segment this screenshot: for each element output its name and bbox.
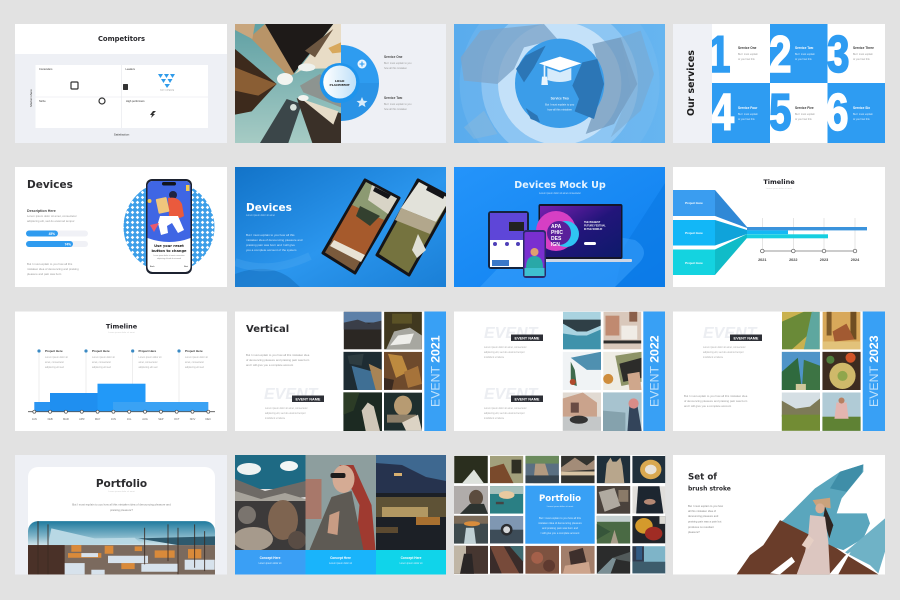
heading: set of brush stroke: Set of xyxy=(688,472,717,482)
portfolio centre block: Lorem ipsum dolor sit amet xyxy=(547,505,574,508)
month axis: MAY xyxy=(95,417,101,421)
service labels: Service Five xyxy=(795,106,814,110)
year band xyxy=(863,312,885,431)
month axis: FEB xyxy=(48,417,53,421)
laptop mockup: PHIC xyxy=(551,230,563,236)
service labels: Service Six xyxy=(853,106,870,110)
event block: EVENT NAME xyxy=(296,398,321,402)
phone mockup: Use your reset xyxy=(154,244,184,248)
heading: our services: Our services xyxy=(686,50,697,116)
month axis: JAN xyxy=(32,417,37,421)
event block two: EVENT xyxy=(484,386,539,403)
heading: timeline: Timeline xyxy=(763,178,795,186)
service labels: Service Three xyxy=(853,46,874,50)
photo grid 2023 xyxy=(782,312,861,431)
text: body: praising pleasure? xyxy=(110,508,133,512)
heading: portfolio: Portfolio xyxy=(96,478,147,490)
event block: Lorem ipsum dolor sit amet, consectetur xyxy=(265,407,308,410)
heading: set of brush stroke: brush stroke xyxy=(688,486,731,492)
panel: monthly timeline slide xyxy=(15,312,227,431)
service labels: Service Two xyxy=(795,46,813,50)
text: service one xyxy=(384,55,412,70)
month axis: JUL xyxy=(127,417,132,421)
text: body: denouncing pleasure and xyxy=(688,514,719,518)
text: body: But I must explain to you how all this mistaken idea of denouncing pleasure and xyxy=(72,502,171,506)
event block: incididunt ut labore xyxy=(265,417,286,420)
month axis: AUG xyxy=(142,417,148,421)
year band xyxy=(424,312,446,431)
service labels: But I must explain xyxy=(795,113,815,116)
numbers: 4 xyxy=(711,83,734,141)
service labels: But I must explain xyxy=(738,113,758,116)
panel: devices mock up slide: Lorem ipsum dolor sit amet consectetur xyxy=(539,192,581,195)
service labels: Service Four xyxy=(738,106,758,110)
progress bars xyxy=(26,230,88,247)
numbers: 5 xyxy=(769,83,792,141)
panel: portfolio grid slide xyxy=(454,455,665,574)
text: service two xyxy=(384,96,412,111)
text: service two: how all this mistaken xyxy=(547,107,572,111)
month axis xyxy=(28,410,215,421)
panel: timeline funnel slide: Lorem ipsum dolor sit amet xyxy=(766,187,793,190)
panel: graduation slide xyxy=(454,24,665,143)
tablet mockup xyxy=(488,211,529,269)
icon: company triangles xyxy=(158,74,175,88)
matrix chart: High performers xyxy=(126,99,145,103)
service labels: to you how this xyxy=(853,58,870,61)
concept bands: Lorem ipsum dolor sit xyxy=(400,562,423,565)
photo: woman with red hair xyxy=(306,455,376,550)
photo: snowy village xyxy=(28,521,215,574)
event block two: incididunt ut labore xyxy=(484,417,505,420)
month axis: SEP xyxy=(158,417,164,421)
event block: EVENT xyxy=(264,386,319,403)
service labels: Service One xyxy=(738,46,757,50)
event block: Lorem ipsum dolor sit amet, consectetur xyxy=(703,346,746,349)
month axis: APR xyxy=(79,417,85,421)
event block two: EVENT NAME xyxy=(515,398,540,402)
matrix chart: Core company xyxy=(160,88,175,92)
time axis xyxy=(758,249,860,262)
text: body: But I must explain to you how all this xyxy=(246,233,295,237)
service labels: But I must explain xyxy=(795,53,815,56)
event block one: Lorem ipsum dolor sit amet, consectetur xyxy=(484,346,527,349)
progress bars: 74% xyxy=(65,242,71,246)
text: service one: how all this mistaken xyxy=(384,67,408,70)
service labels: to you how this xyxy=(738,118,755,121)
project items: Project Here xyxy=(138,349,157,353)
brush stroke image xyxy=(736,464,885,574)
matrix chart xyxy=(29,65,208,136)
event block one: EVENT xyxy=(484,325,539,342)
laptop mockup: THE BIGGEST xyxy=(584,221,601,224)
text: body xyxy=(246,353,310,367)
text: body xyxy=(246,233,303,252)
month axis: JUN xyxy=(111,417,116,421)
panel: timeline funnel slide xyxy=(673,167,885,287)
text: description xyxy=(27,209,77,223)
half circle diagram xyxy=(320,45,379,121)
panel: three concepts slide xyxy=(233,455,446,574)
time axis: 2024 xyxy=(851,258,860,262)
project items xyxy=(37,349,208,402)
panel: portfolio card slide xyxy=(15,455,227,574)
text: body: you a complete account of the system xyxy=(246,248,297,252)
panel: devices slide xyxy=(15,167,227,287)
portfolio centre block xyxy=(525,486,595,544)
numbers xyxy=(708,25,850,141)
panel: devices blue slide xyxy=(235,167,446,287)
concept bands: Lorem ipsum dolor sit xyxy=(329,562,352,565)
text: body: pleasure? xyxy=(688,530,700,534)
concept bands: Concept Here xyxy=(401,556,422,560)
laptop mockup: IN THE WORLD! xyxy=(584,228,603,231)
progress bars: 45% xyxy=(49,232,55,236)
heading: Devices Mock Up xyxy=(514,180,606,191)
text: body: pleasure and pain was born xyxy=(27,272,62,276)
text: body xyxy=(72,502,171,512)
year band: EVENT 2023 xyxy=(867,335,881,407)
photo: skyscrapers xyxy=(235,24,341,143)
event block xyxy=(703,325,762,359)
numbers: 1 xyxy=(708,25,731,83)
text: body xyxy=(688,504,723,534)
illustration: reading figure xyxy=(148,185,190,235)
text: service two: But I must explain to you xyxy=(384,103,412,106)
concept bands: Lorem ipsum dolor sit xyxy=(259,562,282,565)
project items: adipiscing elit sed xyxy=(138,366,158,369)
event block one xyxy=(484,325,543,359)
month axis: OCT xyxy=(174,417,180,421)
laptop mockup xyxy=(533,204,632,262)
event block two: adipiscing elit, sed do eiusmod tempor xyxy=(484,412,525,415)
text: body xyxy=(27,262,79,276)
gantt bars xyxy=(747,218,867,250)
month axis: NOV xyxy=(190,417,196,421)
service labels: to you how this xyxy=(795,58,812,61)
service labels: But I must explain xyxy=(738,53,758,56)
event block: adipiscing elit, sed do eiusmod tempor xyxy=(703,351,744,354)
central circle xyxy=(515,39,604,128)
project items: Project Here xyxy=(45,349,63,353)
matrix chart: Market share xyxy=(29,89,33,107)
text: description: adipiscing elit, sed do eiusmod tempor xyxy=(27,219,75,223)
service labels: to you how this xyxy=(738,58,755,61)
project items: Lorem ipsum dolor sit xyxy=(185,356,208,359)
text: body: and I will give you a complete account xyxy=(246,363,293,367)
logo circle: LOGO xyxy=(335,79,345,83)
photo: night city xyxy=(376,455,446,550)
matrix chart: Leaders xyxy=(126,67,136,71)
event block: EVENT xyxy=(703,325,758,342)
project items: amet, consectetur xyxy=(138,361,158,364)
project items: Project Here xyxy=(185,349,203,353)
icon: graduation cap xyxy=(539,57,581,85)
text: body: of denouncing pleasure and praising pain was born xyxy=(684,399,748,403)
project items: amet, consectetur xyxy=(45,361,64,364)
funnel: Project Here xyxy=(685,231,703,235)
panel: our services slide xyxy=(673,24,885,143)
photo grid 2022 xyxy=(563,312,642,431)
heading: set of brush stroke xyxy=(688,472,731,492)
photo tiles xyxy=(454,456,665,574)
laptop mockup: APA xyxy=(551,224,562,230)
text: description: Description Here xyxy=(27,209,56,213)
woman figure xyxy=(797,498,833,574)
phone mockup: Back xyxy=(150,266,154,268)
panel: brush stroke slide xyxy=(673,455,885,574)
palm leaves xyxy=(461,24,654,139)
text: service two: Service Two xyxy=(551,96,569,100)
text: body: of denouncing pleasure and praising pain was born xyxy=(246,358,310,362)
matrix chart: Satisfaction xyxy=(114,132,130,136)
text: service two xyxy=(545,96,575,111)
icon: plus xyxy=(358,60,366,68)
event block xyxy=(264,386,324,420)
text: body: praising pain was a pain but xyxy=(688,520,722,524)
phone mockup: Lorem ipsum dolor sit amet consectetur xyxy=(153,254,185,257)
concept bands: Concept Here xyxy=(330,556,351,560)
text: body: and I will give you a complete account xyxy=(684,404,731,408)
phone mockup: adipiscing elit sed do eiusmod xyxy=(157,257,181,260)
text: body: But I must explain to you how all this mistaken idea xyxy=(246,353,310,357)
numbers: 3 xyxy=(827,25,850,83)
heading: devices: Devices xyxy=(246,202,292,214)
funnel: Project Here xyxy=(685,201,703,205)
project items: amet, consectetur xyxy=(92,361,111,364)
year band: EVENT 2022 xyxy=(648,335,662,407)
text: body: But I must explain to you how all this xyxy=(27,262,73,266)
event block one: adipiscing elit, sed do eiusmod tempor xyxy=(484,351,525,354)
concept bands xyxy=(235,550,446,574)
panel: monthly timeline slide: Lorem ipsum dolor sit amet xyxy=(108,331,135,334)
portfolio centre block: and praising pain was born and xyxy=(542,526,579,530)
service labels xyxy=(738,46,874,121)
event block: adipiscing elit, sed do eiusmod tempor xyxy=(265,412,306,415)
matrix chart: Contenders xyxy=(39,67,53,71)
funnel xyxy=(673,190,747,275)
text: body: mistaken idea of denouncing and praising xyxy=(27,267,79,271)
service labels: But I must explain xyxy=(853,53,873,56)
project items: Project Here xyxy=(92,349,110,353)
halftone sphere xyxy=(124,182,214,272)
photo grid 2021 xyxy=(343,312,422,431)
text: body: praising pain was born and I will give xyxy=(246,243,295,247)
text: service one: But I must explain to you xyxy=(384,62,412,65)
concept bands: Concept Here xyxy=(260,556,281,560)
phone mockup xyxy=(523,230,546,278)
logo circle xyxy=(320,63,360,103)
project items: amet, consectetur xyxy=(185,361,204,364)
text: service one: Service One xyxy=(384,55,403,59)
laptop mockup: FUTURE FESTIVAL xyxy=(584,224,606,228)
text: service two: Service Two xyxy=(384,96,402,100)
icon: star xyxy=(356,97,368,107)
phone mockup xyxy=(146,179,192,274)
text: body xyxy=(684,394,748,408)
event block: incididunt ut labore xyxy=(703,356,724,359)
service labels: But I must explain xyxy=(853,113,873,116)
panel: logo placement slide xyxy=(235,24,446,143)
portfolio centre block: I will give you a complete account xyxy=(541,531,580,535)
laptop mockup: DES xyxy=(551,236,562,242)
heading: devices: Devices xyxy=(27,179,73,191)
portfolio centre block: mistaken idea of denouncing pleasure xyxy=(538,521,582,525)
project items: adipiscing elit sed xyxy=(92,366,112,369)
month axis: DEC xyxy=(206,417,211,421)
project items: adipiscing elit sed xyxy=(185,366,205,369)
month axis: MAR xyxy=(63,417,69,421)
logo circle: PLACEMENT xyxy=(330,83,351,87)
event block two: Lorem ipsum dolor sit amet, consectetur xyxy=(484,407,527,410)
event block two xyxy=(484,386,543,420)
heading: vertical: Vertical xyxy=(246,324,289,335)
project items: Lorem ipsum dolor sit xyxy=(92,356,115,359)
panel: vertical 2021 slide xyxy=(235,312,446,431)
text: body: produces no resultant xyxy=(688,525,714,529)
project items: Lorem ipsum dolor sit xyxy=(138,356,162,359)
heading: competitors: Competitors xyxy=(98,35,145,43)
stacked bar chart xyxy=(34,384,208,412)
time axis: 2023 xyxy=(820,258,828,262)
panel: vertical 2022 slide xyxy=(454,312,665,431)
phone: food xyxy=(323,180,399,273)
phone: valley xyxy=(377,180,452,275)
numbers: 2 xyxy=(769,25,792,83)
text: body: But I must explain to you how all this mistaken idea xyxy=(684,394,748,398)
portfolio centre block: Portfolio xyxy=(539,494,581,504)
text: description: Lorem ipsum dolor sit amet, consectetur xyxy=(27,214,77,218)
text: body: all this mistaken idea of xyxy=(688,509,716,513)
panel: devices blue slide: Lorem ipsum dolor sit amet xyxy=(246,214,275,217)
icon: logos xyxy=(71,82,156,118)
phone mockup: Next xyxy=(184,265,188,268)
service labels: to you how this xyxy=(853,118,870,121)
year band xyxy=(643,312,665,431)
funnel: Project Here xyxy=(685,261,703,265)
laptop mockup: IGN xyxy=(551,242,560,248)
phone mockup: button to change xyxy=(152,249,187,253)
service labels: to you how this xyxy=(795,118,812,121)
panel: devices mock up slide xyxy=(454,167,665,287)
portfolio centre block: But I must explain to you how all this xyxy=(539,516,582,520)
dark leaves xyxy=(516,46,604,122)
text: body: But I must explain to you how xyxy=(688,504,723,508)
text: body: mistaken idea of denouncing pleasure and xyxy=(246,238,303,242)
numbers: 6 xyxy=(826,83,849,141)
year band: EVENT 2021 xyxy=(428,335,442,407)
panel: vertical 2023 slide xyxy=(673,312,885,431)
matrix chart: Niche xyxy=(39,99,46,103)
event block one: incididunt ut labore xyxy=(484,356,505,359)
photo: mountains and rocks xyxy=(235,455,306,550)
time axis: 2021 xyxy=(758,258,767,262)
project items: Lorem ipsum dolor sit xyxy=(45,356,68,359)
event block one: EVENT NAME xyxy=(515,336,540,340)
panel: competitors slide xyxy=(15,24,227,143)
text: service two: But I must explain to you xyxy=(545,102,575,106)
time axis: 2022 xyxy=(789,258,798,262)
project items: adipiscing elit sed xyxy=(45,366,65,369)
text: service two: how all this mistaken xyxy=(384,108,408,111)
event block: EVENT NAME xyxy=(734,336,759,340)
panel: portfolio card slide: Lorem ipsum dolor sit amet xyxy=(108,490,135,493)
heading: timeline: Timeline xyxy=(106,322,138,330)
